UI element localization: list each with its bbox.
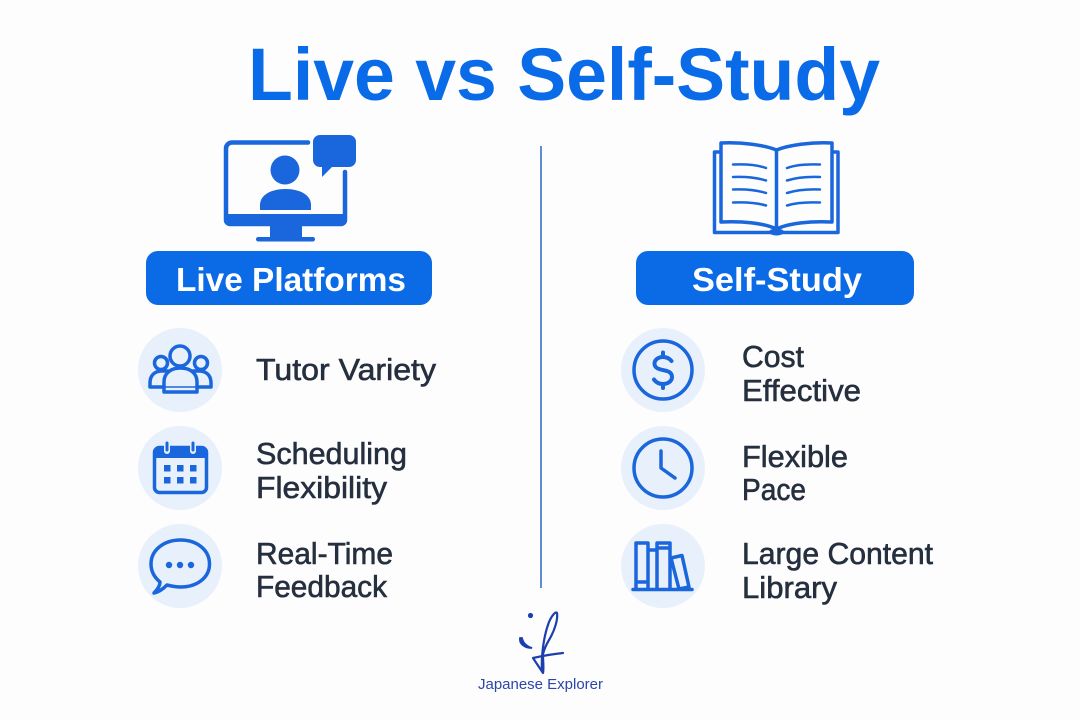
icon: calendar (138, 426, 222, 510)
panel: Live Platforms heading (146, 251, 432, 305)
center divider (540, 146, 542, 588)
label: Large Content Library: Library (742, 570, 837, 605)
logo: Japanese Explorer: Japanese Explorer (478, 677, 603, 693)
icon: chat bubble (138, 524, 222, 608)
label: Cost Effective: Cost (742, 339, 804, 374)
label: Flexible Pace: Pace (742, 472, 806, 507)
label: Scheduling Flexibility: Scheduling (256, 436, 407, 471)
label: Real-Time Feedback: Feedback (256, 569, 387, 604)
icon: clock (621, 426, 705, 510)
label: Flexible Pace (742, 439, 848, 507)
label: Scheduling Flexibility: Flexibility (256, 470, 388, 505)
label: Scheduling Flexibility (256, 436, 407, 505)
label: Tutor Variety: Tutor Variety (256, 352, 437, 387)
label: Large Content Library: Large Content (742, 536, 933, 571)
title: Live vs Self-Study (248, 33, 880, 116)
label: Large Content Library (742, 536, 933, 605)
logo: Japanese Explorer (478, 612, 603, 693)
label: Cost Effective: Effective (742, 373, 861, 408)
icon: dollar coin (621, 328, 705, 412)
icon: monitor with person and speech bubble (226, 135, 356, 242)
label: Real-Time Feedback: Real-Time (256, 536, 393, 571)
icon: books on shelf (621, 524, 705, 608)
icon: open book (714, 143, 838, 236)
label: Cost Effective (742, 339, 861, 408)
panel: Self-Study heading: Self-Study (692, 261, 863, 298)
panel: Live Platforms heading: Live Platforms (176, 261, 406, 298)
panel: Self-Study heading (636, 251, 914, 305)
label: Flexible Pace: Flexible (742, 439, 848, 474)
icon: tutors group (138, 328, 222, 412)
label: Real-Time Feedback (256, 536, 393, 604)
